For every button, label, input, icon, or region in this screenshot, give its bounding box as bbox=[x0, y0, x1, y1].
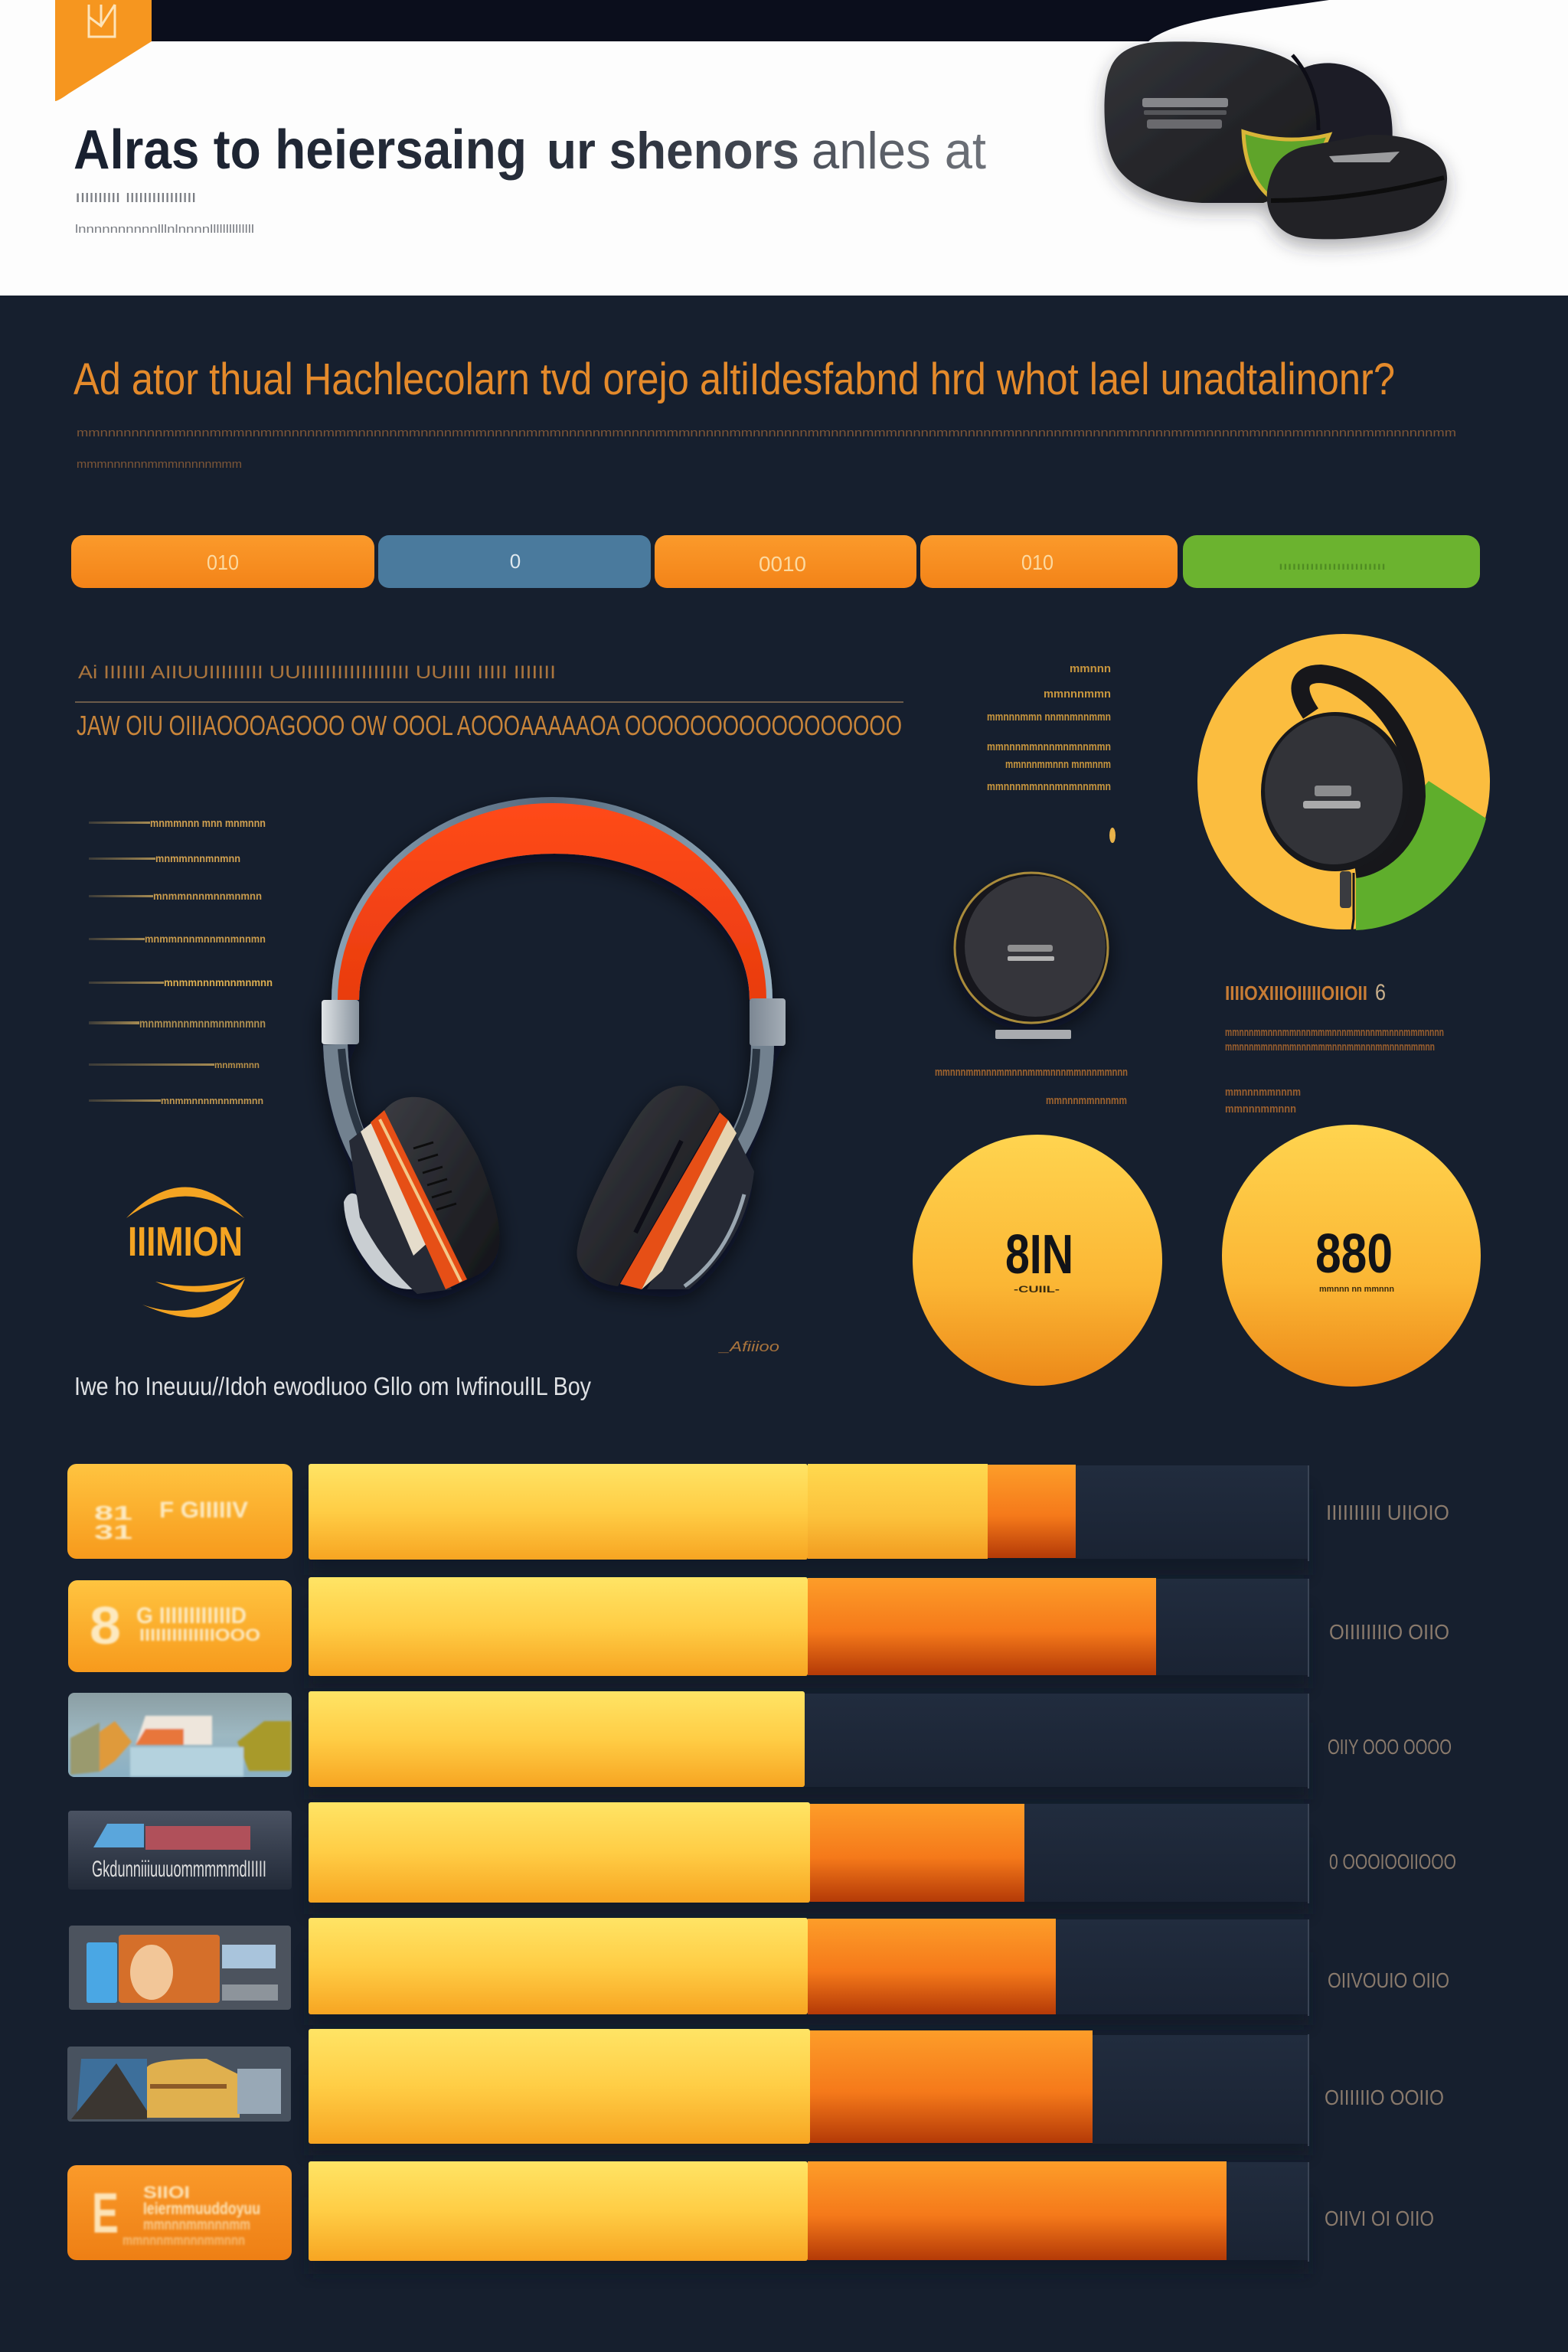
header small text: Illlllllll llllllllllllllll bbox=[75, 191, 196, 205]
category label 1: F GIIIIIV bbox=[159, 1498, 248, 1523]
stat circle 1: 8IN bbox=[1005, 1224, 1073, 1285]
bar value labels: OIIY OOO OOOO bbox=[1328, 1735, 1452, 1759]
bar chart bbox=[309, 1464, 1309, 2274]
header small text bbox=[75, 191, 254, 236]
donut description: mmnnnmmnnnmmnnnmmmnnnmmnnnmmnnnmmmnnnn bbox=[1225, 1026, 1444, 1039]
list row 3: mnmmnnnmnnmnmnn bbox=[153, 890, 262, 902]
green slice bbox=[1356, 781, 1486, 930]
donut description: mmnnnmmnnnm bbox=[1225, 1086, 1301, 1099]
bar value labels: 0 OOOIOOIIOOO bbox=[1329, 1850, 1456, 1873]
list row 2 bbox=[89, 852, 240, 864]
title: Alras to heiersaing bbox=[74, 119, 527, 181]
button 5 bbox=[1183, 535, 1480, 588]
list row 2: mnmmnnnmnmnn bbox=[155, 852, 240, 864]
headband bbox=[332, 797, 773, 1000]
button 1: 010 bbox=[207, 550, 239, 574]
left stem bbox=[335, 1044, 363, 1156]
list row 7 bbox=[89, 1060, 260, 1070]
section heading: Ad ator thual Hachlecolarn tvd orejo altiIdesfabnd hrd whot lael unadtalinonr? bbox=[74, 354, 1395, 404]
list row 5 bbox=[89, 976, 273, 988]
list row 4: mnmmnnnmnnmnmnnmn bbox=[145, 933, 266, 945]
earbud stand bbox=[995, 1030, 1071, 1039]
row 1 bbox=[309, 1464, 1309, 1575]
right aligned text block: mmnnnmmn nnmnmnnmmn bbox=[987, 710, 1111, 724]
category label 7: Ieiermmuuddoyuu bbox=[143, 2199, 260, 2218]
small case bbox=[1267, 135, 1447, 239]
right stem bbox=[733, 1044, 763, 1152]
earbud wire bbox=[1352, 873, 1354, 929]
earbud caption: mmnnnmmnnnmmnnnmmmnnnmmnnnmmnnn bbox=[935, 1066, 1128, 1079]
donut description: IIIIOXIIIOIIIIIOIIOII bbox=[1225, 982, 1367, 1004]
section description bbox=[77, 426, 1456, 471]
category label 6: picture tile bbox=[67, 2047, 291, 2122]
right slider bbox=[750, 998, 786, 1046]
button 1 bbox=[71, 535, 374, 588]
list row 7: mnmmnnn bbox=[214, 1060, 260, 1070]
category label 1: 81 bbox=[94, 1501, 132, 1524]
button 3: 0010 bbox=[759, 552, 806, 576]
donut chart with earbud bbox=[1197, 634, 1490, 930]
stat circle 1 bbox=[913, 1135, 1162, 1386]
green insert bbox=[1243, 132, 1329, 199]
gold indicator dot bbox=[1109, 828, 1116, 843]
right aligned text block bbox=[987, 662, 1111, 793]
brand logo bbox=[126, 1187, 245, 1318]
category label 4: picture tile: GkdunniiiuuuommmmmdIIIII bbox=[92, 1857, 266, 1882]
category label 3: picture tile bbox=[68, 1693, 292, 1777]
bar value labels bbox=[1325, 1501, 1456, 2230]
row 5 bbox=[309, 1918, 1309, 2025]
right aligned text block: mmnnnmmnnnmnmnnmmn bbox=[987, 740, 1111, 753]
row 3 bbox=[309, 1691, 1309, 1799]
category label 7: mmnnnmmnnnmm bbox=[143, 2216, 250, 2233]
earbud caption: mmnnnmmnnnmm bbox=[1046, 1094, 1127, 1107]
earbud logo bbox=[1303, 786, 1361, 808]
button 2 bbox=[378, 535, 651, 588]
bar value labels: OIIIIIIIIO OIIO bbox=[1329, 1620, 1449, 1644]
right stem inner bbox=[730, 1049, 756, 1145]
white caption: Iwe ho Ineuuu//Idoh ewodluoo Gllo om IwfinoulIL Boy bbox=[74, 1372, 591, 1400]
category label 2 bbox=[68, 1580, 292, 1672]
category label 5: picture tile bbox=[69, 1926, 291, 2010]
category label 7 bbox=[67, 2165, 292, 2260]
row 2 bbox=[309, 1577, 1309, 1688]
stat circle 2: mmnnn nn mmnnn bbox=[1319, 1285, 1394, 1294]
header panel bbox=[0, 0, 1568, 296]
headphones illustration bbox=[322, 797, 786, 1294]
list row 1 bbox=[89, 817, 266, 830]
right aligned text block: mmnnn bbox=[1070, 662, 1111, 675]
stat circle 1: -CUIIL- bbox=[1014, 1284, 1060, 1295]
earbud stem bbox=[1340, 871, 1351, 908]
category label 7: E bbox=[92, 2181, 119, 2245]
left slider bbox=[322, 1000, 359, 1044]
donut description: 6 bbox=[1375, 980, 1386, 1005]
bar value labels: OIIVI OI OIIO bbox=[1325, 2207, 1434, 2230]
row 7 bbox=[309, 2161, 1309, 2274]
list row 5: mnmmnnnmnnmnmnn bbox=[164, 976, 273, 988]
left ear cup bbox=[344, 1097, 500, 1294]
bar value labels: IIIIIIIIII UIIOIO bbox=[1326, 1501, 1449, 1524]
donut description bbox=[1225, 980, 1444, 1116]
list row 6: mnmmnnnmnnmnmnnmnn bbox=[139, 1018, 266, 1031]
stat circle 2 bbox=[1222, 1125, 1481, 1387]
section description: mmnnnnnnnnmmnnnmmmnnmmnnnnnmmmnnnnnmmnnnnmmmnnnnnmmmnnnnnmmnnnnmmmnnnnnmmnnnnnnnmmnnnnmmmnnnnnmmnnnnmmnnnnnnmmnnnnmmnnnnmmmnnnnmmnnnnmmnnnnnnmmnnnnnnmm bbox=[77, 426, 1456, 439]
bar value labels: OIIIIIIO OOIIO bbox=[1325, 2086, 1444, 2109]
list row 8 bbox=[89, 1095, 263, 1106]
right aligned text block: mmnnnmmn bbox=[1044, 688, 1111, 701]
stat circle 2: 880 bbox=[1315, 1223, 1393, 1285]
case logo bbox=[1142, 98, 1228, 129]
category label 2: IIIIIIIIIIIIIIOOO bbox=[139, 1625, 260, 1645]
donut description: mmnnnmmnnn bbox=[1225, 1102, 1296, 1116]
button 5: llllllllllllllllllllllll bbox=[1279, 564, 1386, 572]
left stem inner bbox=[341, 1049, 368, 1148]
list row 8: mnmmnnnmnnmnmnn bbox=[161, 1095, 263, 1106]
button 4: 010 bbox=[1021, 550, 1054, 574]
earbud caption bbox=[935, 1066, 1128, 1107]
category label 7: mmnnnmmnnnmmnnn bbox=[122, 2233, 245, 2248]
category label 2: G IIIIIIIIIIIID bbox=[136, 1603, 247, 1628]
list row 6 bbox=[89, 1018, 266, 1031]
earbud charging case product bbox=[1104, 41, 1447, 239]
right ear cup bbox=[577, 1086, 754, 1289]
category label 7: SIIOI bbox=[143, 2183, 190, 2202]
title: ur shenors bbox=[547, 122, 799, 180]
feature intro text: Ai IIIIIII AIIUUIIIIIIIII UUIIIIIIIIIIIIIIIIII UUIIII IIIII IIIIIII bbox=[78, 662, 556, 683]
list row 3 bbox=[89, 890, 262, 902]
earbud hook bbox=[1300, 674, 1416, 869]
right aligned text block: mmnnnmmnnnmnmnnmmn bbox=[987, 780, 1111, 793]
earbud disc bbox=[1261, 712, 1410, 871]
icon: orange ribbon bbox=[55, 0, 152, 101]
donut description: mmnnnmmnnnmmnnnmmmnnnmmnnnmmnnnmmmnn bbox=[1225, 1040, 1435, 1054]
header small text: lnnnnnnnnnnlllnlnnnnllllllllllllll bbox=[75, 223, 254, 236]
category label 1 bbox=[67, 1464, 292, 1559]
title: anles at bbox=[812, 122, 986, 180]
section description: mmmnnnnnnmmmnnnnnmmm bbox=[77, 458, 242, 471]
list row 4 bbox=[89, 933, 266, 945]
header dark strip bbox=[152, 0, 1329, 41]
feature intro text: JAW OIU OIIIAOOOAGOOO OW OOOL AOOOAAAAAOA OOOOOOOOOOOOOOOOO bbox=[77, 710, 902, 741]
row 4 bbox=[309, 1802, 1309, 1914]
category label 4: picture tile bbox=[68, 1811, 292, 1890]
row 6 bbox=[309, 2029, 1309, 2155]
right aligned text block: mmnnnmmnnn mnmnnm bbox=[1005, 758, 1111, 771]
bar value labels: OIIVOUIO OIIO bbox=[1328, 1968, 1449, 1992]
small earbud bbox=[955, 873, 1108, 1023]
list row 1: mnmmnnn mnn mnmnnn bbox=[150, 817, 266, 830]
title bbox=[74, 119, 986, 181]
left feature list bbox=[89, 817, 273, 1106]
category label 1: 31 bbox=[94, 1521, 132, 1544]
category label 2: 8 bbox=[90, 1596, 121, 1655]
brand logo: IIIMION bbox=[128, 1219, 243, 1265]
button 4 bbox=[920, 535, 1178, 588]
button 3 bbox=[655, 535, 916, 588]
button 2: 0 bbox=[510, 550, 521, 573]
tab buttons bbox=[71, 535, 1480, 588]
small caption: _Afiiioo bbox=[717, 1339, 779, 1354]
feature intro text bbox=[75, 662, 903, 741]
